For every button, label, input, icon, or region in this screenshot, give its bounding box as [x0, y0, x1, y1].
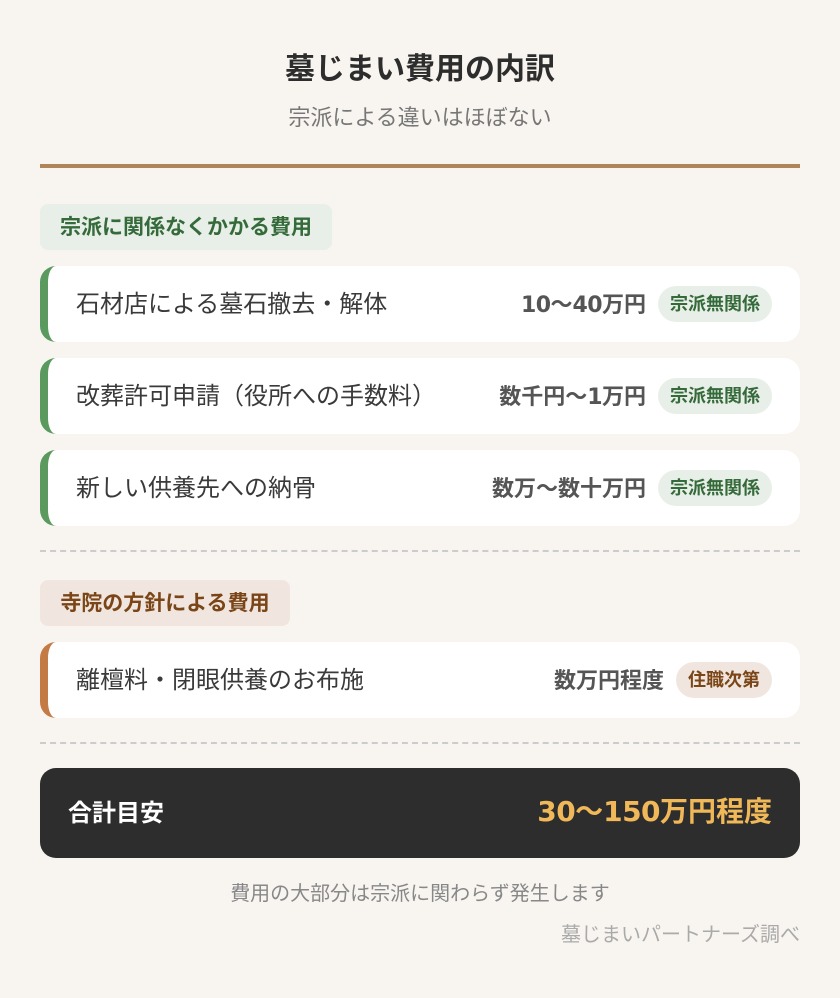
- section label: temple policy costs: 寺院の方針による費用: [60, 587, 270, 617]
- section label: common costs: [40, 204, 332, 250]
- badge: 住職次第: [688, 666, 760, 692]
- title: 墓じまい費用の内訳: [285, 44, 555, 88]
- row amount: 数万〜数十万円: [492, 471, 646, 503]
- footnote: 費用の大部分は宗派に関わらず発生します: [230, 877, 610, 906]
- row amount: 10〜40万円: [521, 287, 646, 319]
- source: 墓じまいパートナーズ調べ: [561, 918, 800, 947]
- badge: 宗派無関係: [670, 290, 760, 316]
- badge: [658, 470, 772, 506]
- header rule: [40, 164, 800, 168]
- subtitle: 宗派による違いはほぼない: [288, 100, 552, 132]
- total label: 合計目安: [68, 793, 164, 828]
- section label: temple policy costs: [40, 580, 290, 626]
- cost row: temple donation: [40, 642, 800, 718]
- badge: 宗派無関係: [670, 474, 760, 500]
- row label: 新しい供養先への納骨: [76, 468, 316, 503]
- row label: 石材店による墓石撤去・解体: [76, 284, 387, 319]
- row label: 改葬許可申請（役所への手数料）: [76, 376, 436, 411]
- badge: [658, 378, 772, 414]
- row amount: 数万円程度: [554, 663, 664, 695]
- cost row: permit: [40, 358, 800, 434]
- total value: 30〜150万円程度: [537, 790, 772, 830]
- cost row: stone removal: [40, 266, 800, 342]
- section label: common costs: 宗派に関係なくかかる費用: [60, 211, 312, 241]
- cost row: new interment: [40, 450, 800, 526]
- badge: 宗派無関係: [670, 382, 760, 408]
- total panel: [40, 768, 800, 858]
- badge: [676, 662, 772, 698]
- row amount: 数千円〜1万円: [499, 379, 646, 411]
- badge: [658, 286, 772, 322]
- row label: 離檀料・閉眼供養のお布施: [76, 660, 364, 695]
